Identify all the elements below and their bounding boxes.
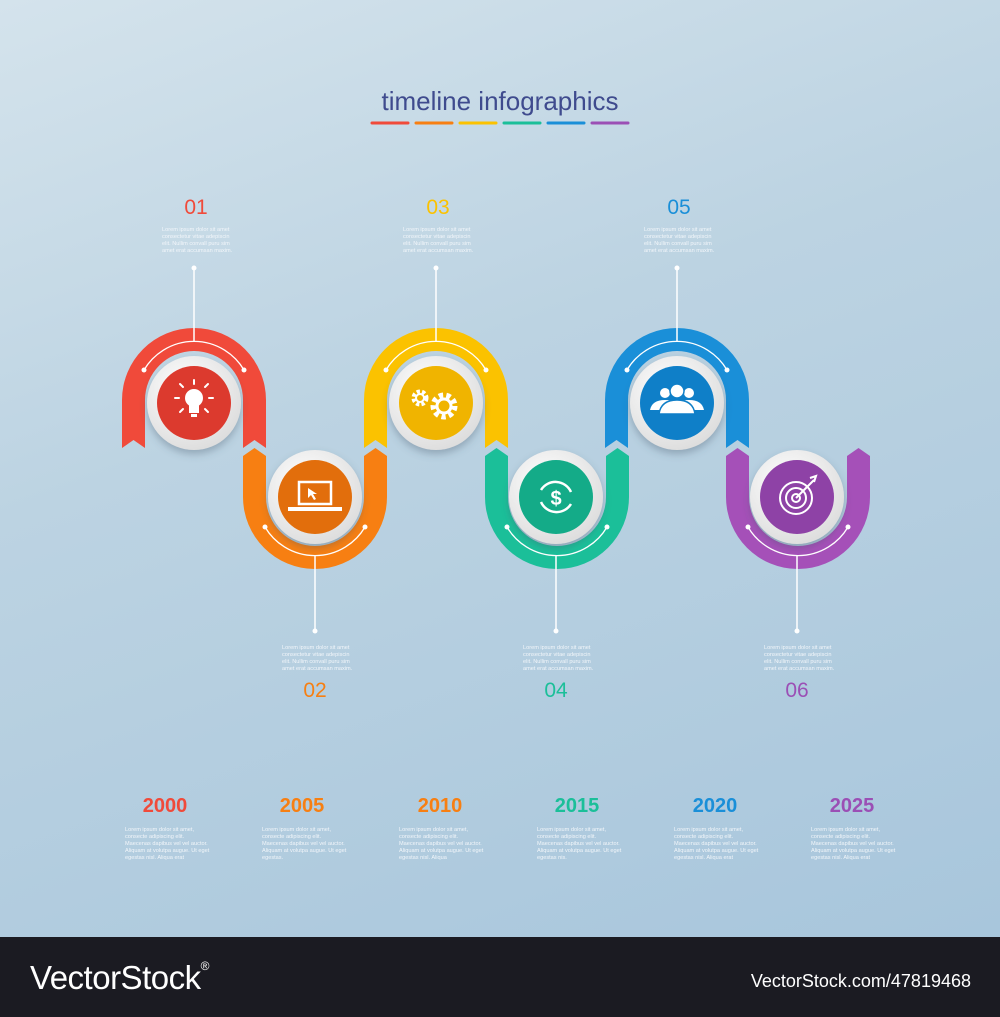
step 06 label: Lorem ipsum dolor sit amet consectetur vitae adepiscin elit. Nullim convall puru sim amet erat accumsan maxim. [764,645,834,672]
ribbon 4 green [485,448,629,634]
text: 02 [303,679,327,702]
ribbon 6 purple [726,448,870,634]
year 2025 [811,795,896,861]
text: Lorem ipsum dolor sit amet, consecte adipiscing elit. Maecenas dapibus vel vel auctor. Aliquam at volutpa augue. Ut eget egestas nis. [537,827,621,861]
footer logo: VectorStock® [30,959,209,996]
footer url: VectorStock.com/47819468 [751,971,971,991]
year 2015 [537,795,622,861]
step 02 label: Lorem ipsum dolor sit amet consectetur vitae adepiscin elit. Nullim convall puru sim amet erat accumsan maxim. [282,645,352,672]
footer bar [0,937,1000,1017]
icon: laptop [299,482,331,504]
ribbon 2 orange [243,448,387,634]
ribbon 1 red [122,266,266,450]
text: 2015 [555,795,599,817]
text: Lorem ipsum dolor sit amet consectetur vitae adepiscin elit. Nullim convall puru sim amet erat accumsan maxim. [644,227,714,254]
text: Lorem ipsum dolor sit amet, consecte adipiscing elit. Maecenas dapibus vel vel auctor. Aliquam at volutpa augue. Ut eget egestas nisl. Aliqua erat [811,827,895,861]
year 2000 [125,795,210,861]
icon: people [650,384,704,414]
icon: dollar cycle: $ [550,488,562,510]
text: Lorem ipsum dolor sit amet, consecte adipiscing elit. Maecenas dapibus vel vel auctor. Aliquam at volutpa augue. Ut eget egestas nisl. Aliqua erat [125,827,209,861]
text: 2000 [143,795,187,817]
step 04 label: Lorem ipsum dolor sit amet consectetur vitae adepiscin elit. Nullim convall puru sim amet erat accumsan maxim. [523,645,593,672]
ribbon 5 blue [605,266,749,450]
text: Lorem ipsum dolor sit amet consectetur vitae adepiscin elit. Nullim convall puru sim amet erat accumsan maxim. [403,227,473,254]
text: 06 [785,679,809,702]
year 2020 [674,795,758,861]
text: 04 [544,679,568,702]
icon: dollar cycle [541,482,571,512]
text: 2010 [418,795,462,817]
icon: target [780,476,816,514]
icon: bulb [175,380,213,417]
step 05 label: 05 [667,196,691,219]
title: timeline infographics [381,86,618,116]
text: 2020 [693,795,737,817]
text: Lorem ipsum dolor sit amet, consecte adipiscing elit. Maecenas dapibus vel vel auctor. Aliquam at volutpa augue. Ut eget egestas nisl. Aliqua erat [674,827,758,861]
icon: gears [414,392,454,416]
ribbon 3 yellow [364,266,508,450]
step 01 label: 01 [184,196,208,219]
text: 2005 [280,795,324,817]
text: Lorem ipsum dolor sit amet, consecte adipiscing elit. Maecenas dapibus vel vel auctor. Aliquam at volutpa augue. Ut eget egestas. [262,827,346,861]
year 2010 [399,795,484,861]
text: Lorem ipsum dolor sit amet consectetur vitae adepiscin elit. Nullim convall puru sim amet erat accumsan maxim. [162,227,232,254]
year 2005 [262,795,346,861]
step 03 label: 03 [426,196,450,219]
text: 2025 [830,795,874,817]
text: Lorem ipsum dolor sit amet, consecte adipiscing elit. Maecenas dapibus vel vel auctor. Aliquam at volutpa augue. Ut eget egestas nisl. Aliqua [399,827,483,861]
